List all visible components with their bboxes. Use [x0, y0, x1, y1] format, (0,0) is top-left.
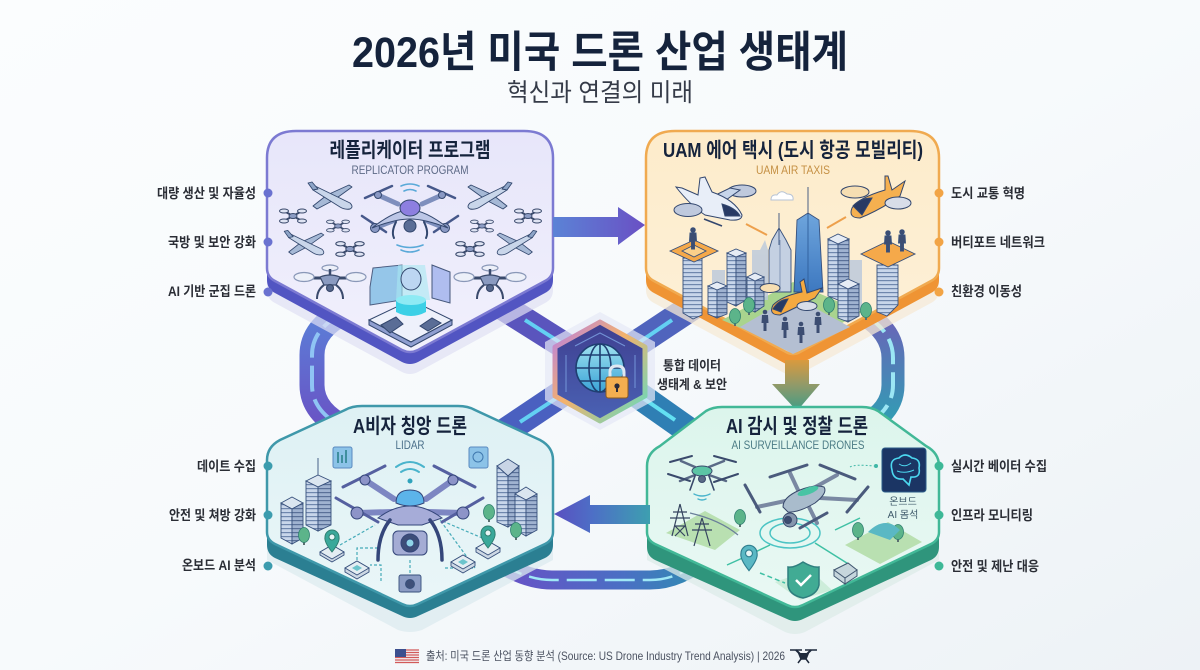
footer: drone icon — [790, 650, 817, 663]
icon: buildings left — [281, 458, 331, 544]
icon: small drones — [280, 209, 542, 256]
icon: surveillance quadcopter — [745, 465, 868, 528]
labels: surveillance: 안전 및 제난 대응 — [951, 559, 1039, 574]
skyline — [712, 240, 862, 310]
hub label: 생태계 & 보안 — [657, 377, 727, 392]
panel subheading: REPLICATOR PROGRAM — [352, 163, 468, 177]
labels: replicator — [157, 186, 272, 299]
arrow: surveillance to LIDAR — [554, 495, 650, 533]
hub label: 통합 데이터 — [663, 358, 721, 373]
icon: circuit lines — [566, 333, 635, 392]
connector: right vertical — [865, 315, 893, 425]
icon: shield — [788, 562, 819, 598]
icon: planes — [284, 182, 537, 255]
panel subheading: UAM AIR TAXIS — [756, 163, 830, 177]
icon: buildings right — [497, 459, 537, 536]
icon: trees — [298, 504, 522, 545]
labels: UAM: 친환경 이동성 — [951, 284, 1022, 299]
icon: location pin — [741, 545, 757, 571]
icon: hologram console — [369, 265, 452, 347]
icon: ground markers — [320, 541, 500, 592]
icon: vertiport left — [670, 228, 718, 319]
title: 2026년 미국 드론 산업 생태계 — [352, 29, 848, 77]
icon: tree — [734, 510, 746, 527]
connector: hub to UAM — [600, 305, 695, 368]
icon: sensor box — [834, 563, 857, 584]
icon: travellers — [762, 310, 822, 343]
icon: data tiles — [333, 447, 488, 468]
labels: UAM: 도시 교통 혁명 — [951, 186, 1025, 201]
icon: scan rings — [760, 518, 820, 548]
icon: trees — [730, 298, 872, 326]
icon: buildings — [708, 187, 859, 322]
panel heading: 레플리케이터 프로그램 — [330, 139, 490, 162]
fields — [666, 511, 922, 600]
icon: cloud — [771, 192, 793, 200]
panel subheading: LIDAR — [396, 438, 425, 452]
labels: replicator: 국방 및 보안 강화 — [168, 235, 257, 250]
icon: AI brain tile — [850, 448, 926, 492]
labels: UAM: 버티포트 네트워크 — [951, 235, 1045, 250]
plaza ground — [722, 282, 862, 350]
icon: padlock — [606, 366, 628, 398]
icon: air taxi white — [674, 177, 756, 226]
subtitle: 혁신과 연결의 미래 — [507, 79, 693, 107]
icon: air taxi orange top — [841, 176, 911, 218]
labels: surveillance: 인프라 모니티링 — [951, 508, 1033, 523]
mini label: 온브드 — [889, 497, 917, 508]
panel: LIDAR — [267, 406, 553, 632]
labels: replicator: 대량 생산 및 자율성 — [157, 186, 256, 201]
panel: UAM air taxis — [646, 131, 939, 376]
connector: hub to lidar — [500, 368, 600, 435]
panel heading: A비자 칭앙 드론 — [353, 415, 467, 438]
panel heading: AI 감시 및 정찰 드론 — [726, 415, 868, 438]
arrow: UAM to surveillance — [772, 360, 820, 411]
icon: connection lines — [727, 518, 860, 583]
connector: hub to replicator — [500, 305, 600, 368]
connector: bottom — [495, 555, 708, 580]
icon: park — [852, 522, 904, 542]
panel: AI surveillance — [647, 407, 939, 634]
footer: flag — [395, 649, 419, 664]
hub: integrated data — [545, 312, 655, 430]
icon: quadcopters bottom — [294, 265, 526, 299]
icon: air taxi orange bottom — [760, 279, 822, 315]
hub label — [657, 358, 727, 392]
icon: LIDAR quadcopter — [336, 462, 483, 560]
icon: globe — [576, 344, 624, 392]
labels: LIDAR: 안전 및 쳐방 강화 — [169, 508, 257, 523]
connector: left vertical — [312, 312, 345, 428]
footer: source: 출처: 미국 드론 산업 동향 분석 (Source: US Drone Industry Trend Analysis) | 2026 — [426, 649, 785, 663]
panel subheading: AI SURVEILLANCE DRONES — [732, 438, 864, 452]
labels: replicator: AI 기반 군집 드론 — [168, 284, 256, 299]
labels: LIDAR: 데이트 수집 — [197, 459, 256, 474]
icon: network lines — [340, 520, 487, 581]
labels: UAM — [934, 186, 1045, 299]
icon: route arrows — [746, 217, 846, 235]
icon: small drone — [668, 456, 738, 500]
icon: main quadcopter — [362, 184, 458, 252]
labels: surveillance: 실시간 베이터 수집 — [951, 459, 1047, 474]
icon: pylons — [670, 504, 738, 546]
panel: replicator program — [267, 131, 553, 374]
labels: LIDAR — [169, 459, 272, 573]
mini label: AI 몸석 — [888, 509, 918, 521]
labels: LIDAR: 온보드 AI 분석 — [182, 558, 256, 573]
labels: surveillance — [934, 459, 1047, 574]
arrow: replicator to UAM — [553, 207, 645, 245]
connector: hub to surveillance — [600, 368, 695, 435]
panel heading: UAM 에어 택시 (도시 항공 모빌리티) — [663, 139, 923, 162]
icon: vertiport right — [861, 230, 915, 316]
icon: location pins — [325, 526, 495, 552]
